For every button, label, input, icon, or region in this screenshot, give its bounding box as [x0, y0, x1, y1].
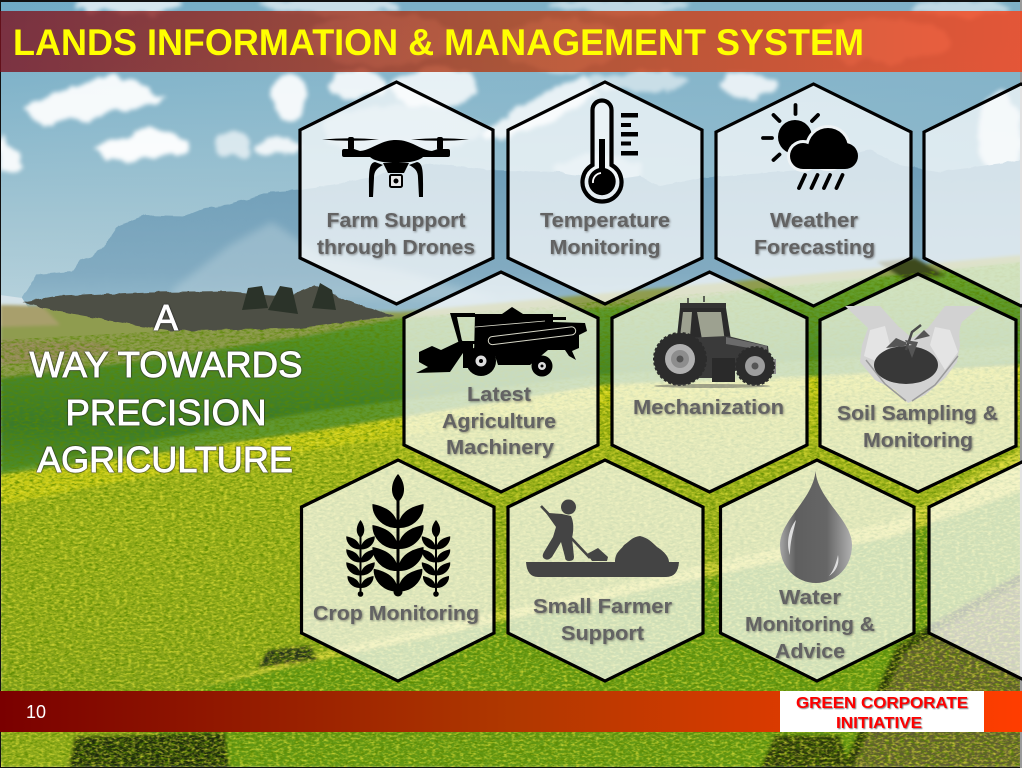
label: Support	[561, 623, 644, 645]
label: Monitoring &	[745, 614, 875, 636]
side heading: a way towards precision agriculture	[30, 297, 302, 480]
icon: farmer shovelling soil	[526, 500, 679, 577]
icon: tractor	[654, 296, 776, 388]
logo box: green corporate initiative	[780, 691, 984, 732]
footer band	[0, 691, 1022, 732]
label: Water	[779, 587, 841, 609]
icon: thermometer	[582, 100, 638, 202]
icon: drone	[322, 137, 469, 197]
hexagon panel: latest agriculture machinery	[404, 272, 598, 492]
label: Mechanization	[633, 397, 784, 419]
label	[754, 210, 875, 259]
hexagon panel: temperature monitoring	[508, 82, 702, 304]
label	[837, 403, 998, 452]
icon: combine harvester	[416, 307, 587, 376]
icon: wheat plants	[346, 474, 450, 597]
title banner	[0, 11, 1022, 72]
logo box: green corporate initiative: GREEN CORPORATE	[796, 695, 968, 712]
hexagon panel: water monitoring and advice	[720, 460, 914, 681]
hexagon panel: crop monitoring	[302, 460, 494, 681]
page number: 10	[26, 702, 46, 722]
hexagon panel: mechanization	[612, 272, 807, 492]
icon: water drop	[780, 471, 852, 583]
label: Farm Support	[326, 210, 466, 232]
side heading: a way towards precision agriculture: A	[154, 297, 178, 338]
hexagon panel: weather forecasting	[716, 84, 911, 306]
side heading: a way towards precision agriculture: AGRICULTURE	[37, 439, 293, 480]
hexagon panel: soil sampling and monitoring	[820, 274, 1016, 492]
label	[745, 587, 875, 663]
label: Monitoring	[863, 430, 973, 452]
label: Crop Monitoring	[313, 603, 479, 625]
logo box: green corporate initiative: INITIATIVE	[836, 715, 922, 732]
label	[442, 384, 556, 459]
distant hill with trees	[22, 285, 395, 331]
label: Weather	[770, 210, 858, 232]
label	[317, 210, 475, 259]
label: Agriculture	[442, 411, 556, 433]
label: Latest	[467, 384, 531, 406]
hexagon panel: farm support through drones	[300, 82, 493, 304]
label: Monitoring	[550, 237, 660, 259]
label: Temperature	[540, 210, 670, 232]
label: Machinery	[446, 437, 555, 459]
label: Small Farmer	[533, 596, 672, 618]
label: Forecasting	[754, 237, 875, 259]
hexagon panel: small farmer support	[508, 460, 703, 681]
label	[540, 210, 670, 259]
icon: sun, cloud and rain	[763, 105, 858, 188]
hexagon panel: empty top right	[924, 84, 1022, 306]
side heading: a way towards precision agriculture: PRECISION	[66, 392, 266, 433]
label: Advice	[775, 641, 845, 663]
hexagon panel: empty bottom right	[929, 460, 1022, 681]
side heading: a way towards precision agriculture: WAY TOWARDS	[30, 344, 302, 385]
label: through Drones	[317, 237, 475, 259]
title text: LANDS INFORMATION & MANAGEMENT SYSTEM	[13, 22, 864, 63]
label	[533, 596, 672, 645]
label: Soil Sampling &	[837, 403, 998, 425]
icon: hands holding soil and seedling	[845, 306, 981, 403]
